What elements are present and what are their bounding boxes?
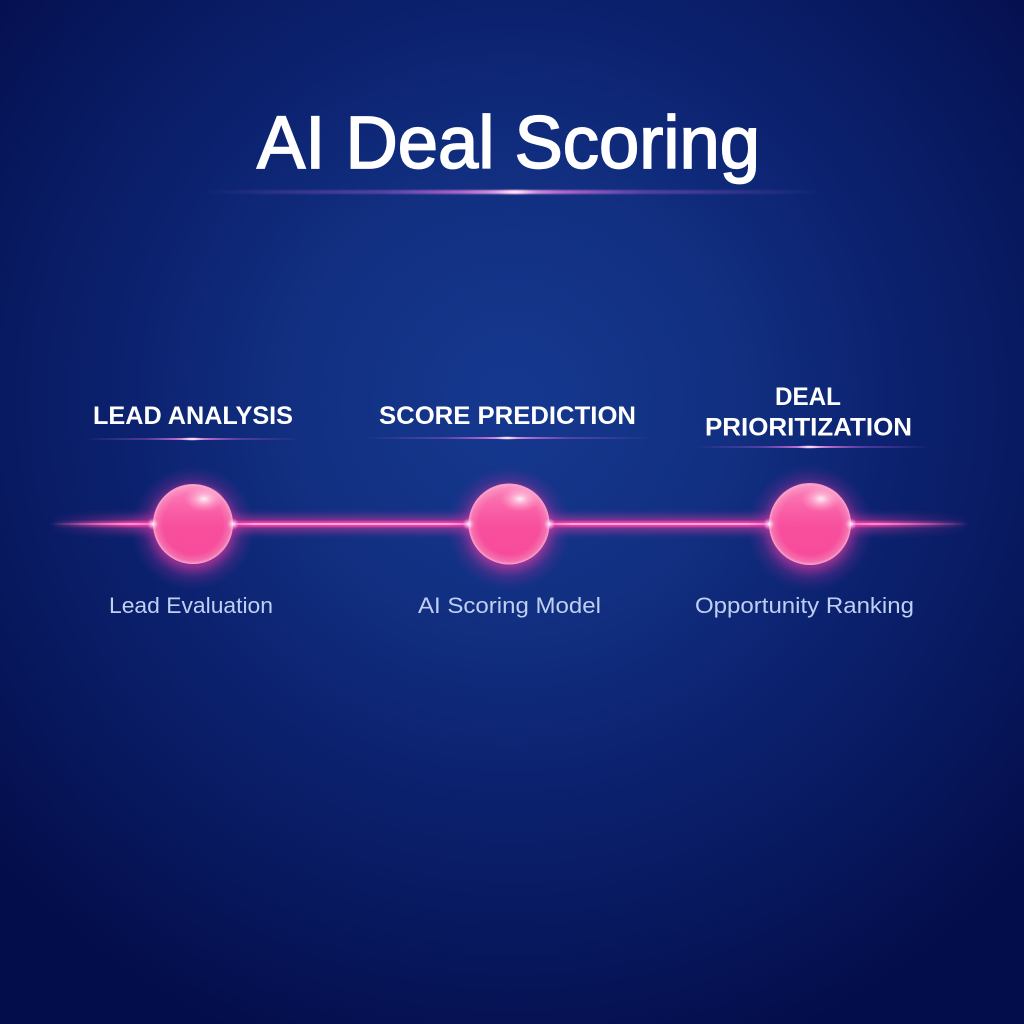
step 1 heading: LEAD ANALYSIS xyxy=(93,402,293,430)
step 1 heading underline xyxy=(85,437,300,441)
step 1 description: Lead Evaluation xyxy=(109,593,273,618)
step 3 heading: PRIORITIZATION xyxy=(705,414,912,442)
step 3 heading: DEAL xyxy=(775,383,841,411)
step 2 node xyxy=(447,466,571,590)
step 2 heading: SCORE PREDICTION xyxy=(379,402,636,430)
step 3: deal prioritization xyxy=(695,383,930,618)
title: AI Deal Scoring xyxy=(257,101,760,184)
step 2: score prediction xyxy=(365,402,650,618)
step 2 description: AI Scoring Model xyxy=(418,593,601,618)
step 3 heading xyxy=(705,383,912,442)
step 1 node xyxy=(131,466,255,590)
connector line with glow xyxy=(50,516,970,532)
step 3 node xyxy=(747,465,873,591)
title underline glow xyxy=(205,189,820,195)
step 2 heading underline xyxy=(365,436,650,440)
step 1: lead analysis xyxy=(85,402,300,618)
step 3 heading underline xyxy=(695,445,930,449)
step 3 description: Opportunity Ranking xyxy=(695,593,914,618)
